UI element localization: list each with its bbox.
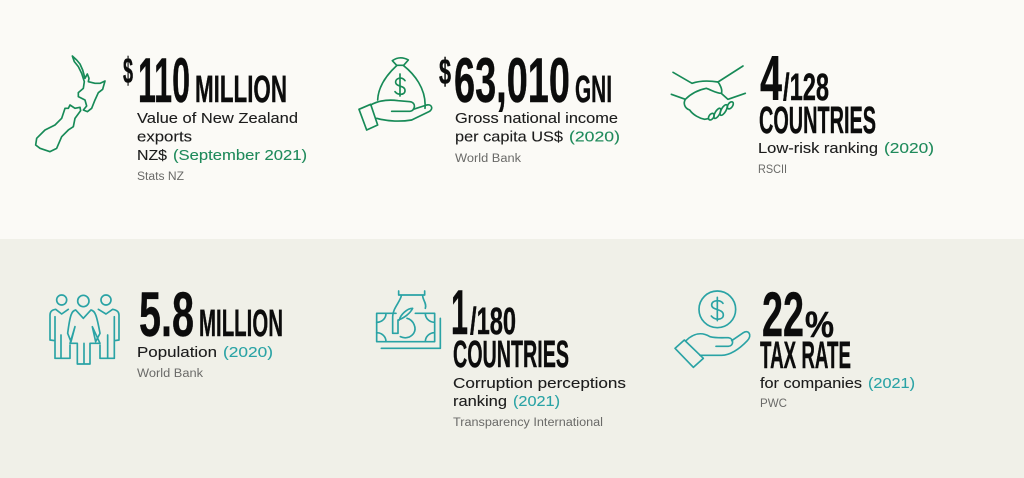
text: income description: Gross national income	[455, 111, 618, 127]
heading: 4/128 countries: COUNTRIES	[759, 100, 876, 142]
text: ranking description: (2020)	[884, 141, 934, 157]
text: export description: exports	[137, 130, 192, 146]
text: population description	[137, 345, 273, 361]
heading: $63,010 GNI: GNI	[575, 69, 612, 111]
heading: 22% tax rate: 22	[762, 280, 804, 350]
icon: three people	[50, 295, 119, 364]
heading: 4/128 countries	[759, 44, 876, 142]
text: tax description: for companies	[760, 376, 862, 392]
source: Transparency International: Transparency International	[453, 417, 603, 429]
source: PWC: PWC	[760, 398, 787, 410]
panel: low-risk ranking	[671, 44, 934, 176]
panel: corruption ranking	[377, 278, 626, 429]
text: corruption description: ranking	[453, 394, 507, 410]
panel: gross national income	[359, 46, 620, 165]
heading: 4/128 countries: /128	[783, 67, 829, 109]
heading: 22% tax rate	[760, 280, 851, 377]
icon: handshake	[671, 66, 745, 121]
text: income description: per capita US$	[455, 130, 563, 146]
heading: 1/180 countries	[451, 278, 569, 376]
panel: tax rate	[675, 280, 915, 410]
panel: export value	[36, 46, 307, 183]
text: corruption description: Corruption perceptions	[453, 376, 626, 392]
text: ranking description	[758, 141, 934, 157]
text: income description: (2020)	[569, 130, 620, 146]
text: population description: Population	[137, 345, 217, 361]
text: corruption description: (2021)	[513, 394, 560, 410]
heading: 1/180 countries: 1	[451, 278, 468, 348]
text: export description	[137, 111, 307, 164]
heading: $63,010 GNI: 63,010	[454, 46, 570, 116]
icon: coin above hand	[675, 291, 750, 367]
background: top band	[0, 0, 1024, 239]
text: tax description: (2021)	[868, 376, 915, 392]
source: World Bank: World Bank	[137, 368, 203, 380]
icon: money bag on hand	[359, 58, 432, 130]
panel: population	[50, 280, 283, 380]
text: export description: NZ$	[137, 148, 167, 164]
panel: tax rate: TAX RATE	[760, 335, 851, 377]
heading: 5.8 million: MILLION	[199, 303, 283, 345]
heading: $110 million: 110	[138, 46, 190, 116]
heading: 5.8 million: 5.8	[139, 280, 194, 350]
text: tax description	[760, 376, 915, 392]
icon: New Zealand map	[36, 56, 105, 152]
background: bottom band	[0, 239, 1024, 478]
heading: 1/180 countries: /180	[470, 301, 516, 343]
icon: banknotes	[377, 291, 440, 348]
heading: 22% tax rate: %	[805, 304, 834, 345]
heading: 1/180 countries: COUNTRIES	[453, 334, 569, 376]
source: Stats NZ: Stats NZ	[137, 171, 184, 183]
heading: $110 million	[123, 46, 287, 116]
heading: $63,010 GNI: $	[439, 51, 451, 92]
source: RSCII: RSCII	[758, 164, 787, 176]
heading: $110 million: $	[123, 50, 133, 91]
text: ranking description: Low-risk ranking	[758, 141, 878, 157]
heading: 5.8 million	[139, 280, 283, 350]
text: income description	[455, 111, 620, 146]
source: World Bank: World Bank	[455, 153, 521, 165]
text: corruption description	[453, 376, 626, 410]
text: export description: Value of New Zealand	[137, 111, 298, 127]
text: population description: (2020)	[223, 345, 273, 361]
text: export description: (September 2021)	[173, 148, 307, 164]
heading: 4/128 countries: 4	[760, 44, 782, 114]
heading: $110 million: MILLION	[195, 69, 287, 111]
